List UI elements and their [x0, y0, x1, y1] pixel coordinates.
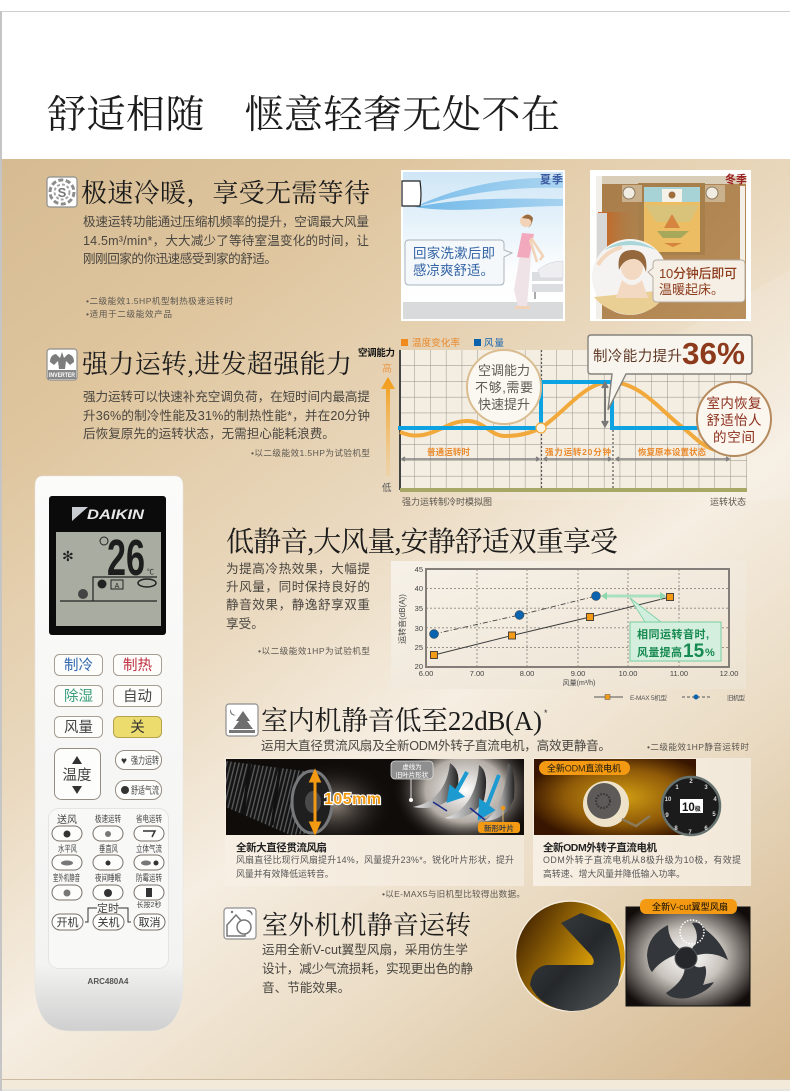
- icon: sofa: [531, 261, 563, 299]
- button: dehumidify: 除湿: [64, 688, 93, 705]
- description: [226, 561, 370, 631]
- callout: comfort restored: 舒适怡人: [706, 413, 762, 428]
- phase labels: [427, 447, 706, 457]
- callout: capacity need: 空调能力: [478, 363, 530, 378]
- display: DAIKIN: [87, 506, 145, 522]
- y axis: 空调能力: [358, 347, 395, 359]
- section: indoor unit quiet: *: [544, 708, 548, 718]
- icon: inverter muscle: INVERTER: [49, 372, 75, 379]
- legend: [401, 337, 504, 349]
- label: new blade: 新形叶片: [484, 823, 514, 833]
- phase labels: 普通运转时: [427, 447, 470, 457]
- button: off: 关: [130, 719, 145, 736]
- panel: cross-flow fan: [225, 758, 524, 886]
- button: comfort airflow: 舒适气流: [131, 784, 159, 797]
- badge: [539, 761, 630, 775]
- title: 舒适相随 惬意轻奢无处不在: [47, 94, 560, 137]
- callout: 15 percent: %: [705, 647, 715, 659]
- series: E-MAX 5: [430, 594, 674, 658]
- legend: E-MAX 5机型: [630, 693, 668, 702]
- callout: capacity need: 不够,需要: [475, 380, 533, 395]
- photo: V-cut blade close-up: [516, 901, 626, 1011]
- x axis label: 运转状态: [710, 496, 746, 507]
- button: powerful: ♥: [121, 756, 127, 767]
- phase labels: 恢复原本设置状态: [638, 447, 706, 457]
- description: 为提高冷热效果，大幅提: [226, 561, 370, 576]
- icon: 10-pole diagram: 9: [665, 813, 669, 819]
- card text: ODM外转子直流电机从8极升级为10极，有效提: [543, 854, 741, 865]
- small button panel: 夜间睡眠: [95, 872, 121, 883]
- display: [49, 496, 166, 635]
- caption: 强力运转制冷时模拟图: [402, 496, 492, 507]
- button: temperature: 温度: [62, 767, 92, 784]
- description: 享受。: [226, 616, 264, 631]
- description: [83, 214, 369, 266]
- legend: 旧机型: [727, 693, 746, 702]
- label: summer: 夏季: [540, 173, 563, 186]
- y axis labels: [415, 565, 423, 671]
- small button panel: 省电运转: [136, 813, 162, 824]
- logo: [72, 507, 88, 521]
- icon: 10-pole diagram: 6: [704, 826, 708, 832]
- panel: ODM DC motor: [533, 758, 751, 886]
- description: 14.5m³/min*，大大减少了等待室温变化的时间，让: [83, 233, 369, 248]
- y axis: [358, 347, 395, 494]
- icon: motor: [583, 781, 650, 827]
- button: comfort airflow: [116, 780, 162, 800]
- callout: 15 percent: 15: [683, 641, 705, 662]
- display: A: [115, 583, 120, 590]
- icon: 10-pole diagram: 8: [674, 826, 678, 832]
- description: 后恢复原先的运转状态，无需担心能耗浪费。: [83, 426, 335, 441]
- speech bubble: 回家洗漱后即: [413, 245, 495, 261]
- button: heat: 制热: [123, 657, 152, 674]
- description: 强力运转可以快速补充空调负荷，在短时间内最高提: [83, 389, 370, 404]
- card text: [543, 854, 741, 879]
- icon: S swirl fan: [47, 177, 77, 207]
- label: winter: 冬季: [725, 172, 747, 186]
- x axis labels: 9.00: [571, 669, 585, 678]
- card title: 全新大直径贯流风扇: [236, 841, 327, 854]
- heading: 强力运转,进发超强能力: [82, 350, 352, 379]
- heading: 室外机机静音运转: [262, 911, 471, 940]
- x axis labels: 12.00: [720, 669, 738, 678]
- heading: 室内机静音低至22dB(A): [261, 706, 542, 736]
- icon: inverter muscle: [47, 349, 77, 380]
- section: quiet with high airflow: [226, 526, 618, 656]
- icon: 10-pole diagram: 7: [688, 830, 692, 836]
- label: 105mm: 105mm: [324, 791, 381, 808]
- y axis labels: 40: [415, 584, 423, 593]
- y axis: 高: [382, 362, 392, 375]
- line chart: powerful mode simulation: [358, 335, 771, 507]
- section: indoor unit quiet: [226, 704, 749, 753]
- section: rapid cooling and heating: [47, 177, 370, 319]
- icon: nightstands: [622, 185, 725, 202]
- card text: [236, 854, 514, 879]
- x axis labels: [419, 669, 738, 678]
- y axis labels: 20: [415, 662, 423, 671]
- y axis labels: 30: [415, 624, 423, 633]
- callout: capacity need: 快速提升: [478, 397, 530, 412]
- label: old blade: 旧叶片形状: [396, 770, 429, 779]
- legend: [594, 693, 746, 702]
- x axis title: 风量(m³/h): [563, 679, 595, 687]
- badge: V-cut fan: [640, 899, 737, 914]
- label: new blade: [478, 806, 520, 833]
- figure: woman close-up: [592, 239, 668, 315]
- card text: 高转速、增大风量并降低输入功率。: [543, 868, 685, 879]
- icon: 10-pole diagram: 10: [665, 797, 672, 803]
- small button panel: 开机: [56, 915, 78, 929]
- button: auto: 自动: [123, 688, 152, 705]
- remote control: [35, 476, 183, 1031]
- label: old blade: [391, 761, 433, 802]
- legend: 温度变化率: [412, 337, 460, 349]
- figure: woman: [514, 214, 543, 309]
- footnote: •二级能效1HP静音运转时: [647, 741, 749, 752]
- description: 音、节能效果。: [262, 980, 350, 995]
- description: 升风量，同时保持良好的: [226, 579, 370, 594]
- button: fan speed: 风量: [64, 719, 93, 736]
- speech bubble: [648, 260, 745, 302]
- phase labels: 强力运转20分钟: [545, 447, 611, 457]
- icon: 10-pole diagram: 1: [675, 785, 679, 791]
- button: powerful: 强力运转: [131, 754, 159, 767]
- description: 设计，减少气流损耗，实现更出色的静: [262, 961, 473, 976]
- small button panel: 长按2秒: [137, 900, 161, 909]
- callout: 36 percent: 制冷能力提升: [593, 348, 682, 365]
- small button panel: 防霉运转: [136, 872, 162, 883]
- x axis labels: 8.00: [520, 669, 534, 678]
- button: powerful: [116, 750, 162, 770]
- badge: 全新ODM直流电机: [547, 762, 621, 774]
- footnotes: •适用于二级能效产品: [86, 308, 172, 319]
- callout: 15 percent: 风量提高: [637, 645, 682, 659]
- icon: bed: [638, 183, 705, 255]
- photo: V-cut fan: [626, 907, 750, 1006]
- legend: 风量: [484, 338, 504, 349]
- small button panel: 垂直风: [99, 843, 118, 854]
- icon: 10-pole diagram: 4: [713, 797, 717, 803]
- display: ✻: [62, 548, 74, 564]
- phase arrows: [402, 457, 729, 461]
- heading: 低静音,大风量,安静舒适双重享受: [226, 526, 618, 558]
- mode buttons: [54, 654, 162, 738]
- description: 升36%的制冷性能及31%的制热性能*，并在20分钟: [83, 408, 370, 423]
- callout: comfort restored: [697, 382, 771, 456]
- icon: S swirl fan: S: [58, 185, 67, 200]
- description: [83, 389, 370, 441]
- display: ℃: [147, 568, 154, 576]
- series: airflow: [398, 382, 705, 428]
- icon: 10-pole diagram: 5: [712, 812, 716, 818]
- description: 运用大直径贯流风扇及全新ODM外转子直流电机，高效更静音。: [261, 738, 611, 753]
- footnote: comparison: •以E-MAX5与旧机型比较得出数据。: [382, 888, 525, 899]
- arrow: diameter: [311, 772, 319, 832]
- card text: 风量并有效降低运转音。: [236, 868, 334, 879]
- small button panel: 极速运转: [95, 813, 121, 824]
- icon: night tree: [226, 704, 258, 736]
- speech bubble: 温暖起床。: [659, 282, 724, 297]
- icon: 10-pole diagram: [662, 777, 720, 836]
- speech bubble: [405, 240, 512, 285]
- description: 极速运转功能通过压缩机频率的提升，空调最大风量: [83, 214, 369, 229]
- y axis: 低: [382, 482, 392, 494]
- badge: V-cut fan: 全新V-cut翼型风扇: [652, 901, 728, 912]
- x axis labels: 6.00: [419, 669, 433, 678]
- small button panel: [48, 808, 168, 968]
- description: 刚刚回家的你迅速感受到家的舒适。: [83, 251, 277, 266]
- footnotes: [86, 295, 233, 319]
- series: temperature change rate: [400, 382, 715, 450]
- button: cool: 制冷: [64, 657, 93, 674]
- description: 静音效果，静逸舒享双重: [226, 597, 370, 612]
- small button panel: 水平风: [58, 843, 77, 854]
- series: old model: [430, 592, 600, 638]
- arrows: airflow: [449, 772, 499, 817]
- callout: 15 percent: [601, 592, 721, 662]
- button: temperature: [54, 748, 100, 800]
- y axis labels: 35: [415, 604, 423, 613]
- icon: 10-pole diagram: 10极: [682, 802, 701, 814]
- panel: winter illustration: [590, 170, 751, 321]
- icon: outdoor unit house: [224, 908, 256, 939]
- panel: summer illustration: [401, 170, 565, 321]
- model number: ARC480A4: [88, 977, 129, 986]
- y axis title: 运转音(dB(A)): [397, 594, 407, 644]
- section: outdoor unit quiet: [224, 908, 473, 995]
- small button panel: 立体气流: [136, 843, 162, 854]
- icon: air stream: [415, 178, 563, 210]
- speech bubble: 感凉爽舒适。: [413, 262, 494, 278]
- speech bubble: 10分钟后即可: [659, 266, 737, 281]
- x axis labels: 7.00: [470, 669, 484, 678]
- icon: fan: [647, 923, 728, 998]
- small button panel: 关机: [98, 915, 120, 929]
- icon: 10-pole diagram: 3: [704, 785, 708, 791]
- callout: 36 percent: 36%: [682, 336, 745, 371]
- icon: fan blades: [413, 763, 514, 821]
- small button panel: 取消: [138, 915, 160, 929]
- x axis labels: 10.00: [619, 669, 637, 678]
- label: old blade: 虚线为: [402, 762, 422, 771]
- small button panel: 送风: [57, 813, 77, 826]
- callout: 15 percent: 相同运转音时,: [637, 627, 709, 641]
- scatter line chart: noise vs airflow: [391, 561, 746, 702]
- footnotes: •二级能效1.5HP机型制热极速运转时: [86, 295, 233, 306]
- highlight circle: [680, 920, 704, 944]
- timer: 定时: [97, 901, 119, 915]
- icon: indoor unit: [402, 181, 421, 206]
- icon: 10-pole diagram: 2: [689, 779, 693, 785]
- plot grid: [399, 350, 747, 490]
- callout: 36 percent: [588, 335, 752, 410]
- footnote: •以二级能效1.5HP为试验机型: [251, 447, 370, 458]
- footnote: •以二级能效1HP为试验机型: [258, 645, 370, 656]
- callout: comfort restored: 室内恢复: [706, 395, 762, 411]
- description: 运用全新V-cut翼型风扇，采用仿生学: [262, 942, 468, 957]
- callout: capacity need: [467, 350, 541, 424]
- temperature reading: 26: [107, 529, 145, 586]
- y axis labels: 45: [415, 565, 423, 574]
- callout: comfort restored: 的空间: [713, 430, 755, 445]
- card title: 全新ODM外转子直流电机: [543, 841, 658, 854]
- heading: 极速冷暖，享受无需等待: [81, 179, 370, 208]
- description: [262, 942, 473, 995]
- y axis labels: 25: [415, 643, 423, 652]
- section: powerful mode: [47, 349, 370, 458]
- icon: fan cylinder: [226, 761, 332, 835]
- arrow: capacity rise: [602, 383, 608, 426]
- card text: 风扇直径比现行风扇提升14%，风量提升23%*。锐化叶片形状，提升: [236, 854, 514, 865]
- small button panel: 室外机静音: [53, 872, 80, 883]
- plot area: [426, 569, 729, 667]
- x axis labels: 11.00: [670, 669, 688, 678]
